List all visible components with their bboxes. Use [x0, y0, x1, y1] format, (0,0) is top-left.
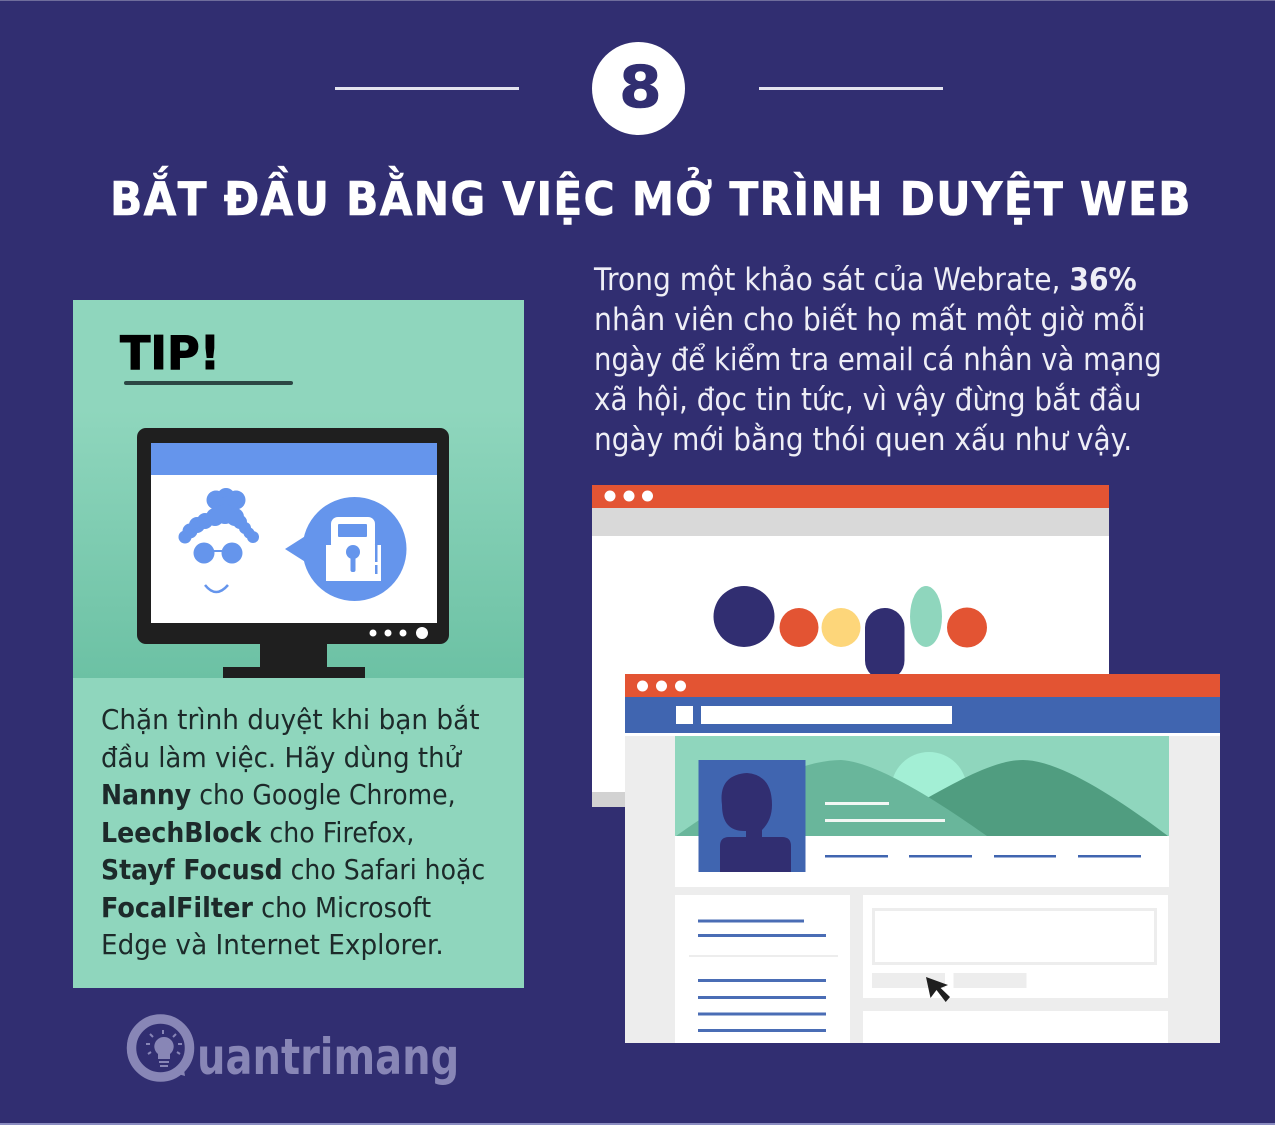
icon: monitor — [137, 428, 449, 678]
icon: mouse cursor — [926, 977, 950, 1002]
tip body text: Stayf Focusd cho Safari hoặc — [101, 853, 485, 886]
intro paragraph: xã hội, đọc tin tức, vì vậy đừng bắt đầu — [594, 382, 1142, 418]
tip body text: Nanny cho Google Chrome, — [101, 778, 456, 811]
title: BẮT ĐẦU BẰNG VIỆC MỞ TRÌNH DUYỆT WEB — [110, 172, 1192, 226]
header: number badge with lines: 8 — [619, 53, 662, 121]
intro paragraph: Trong một khảo sát của Webrate, 36% — [594, 262, 1137, 298]
tip body text: FocalFilter cho Microsoft — [101, 890, 431, 924]
watermark: Quantrimang logo: uantrimang — [197, 1028, 459, 1086]
illustration: front browser window with profile page — [625, 674, 1220, 1043]
tip body text: LeechBlock cho Firefox, — [101, 816, 414, 848]
tip underline — [124, 381, 293, 385]
tip body text: Edge và Internet Explorer. — [101, 928, 444, 961]
tip body text: Chặn trình duyệt khi bạn bắt — [101, 703, 480, 736]
watermark: Quantrimang logo — [126, 1014, 459, 1086]
intro paragraph: ngày mới bằng thói quen xấu như vậy. — [594, 422, 1132, 458]
illustration: back browser window with Google — [592, 485, 1109, 807]
tip heading: TIP! — [120, 326, 220, 380]
tip body text: đầu làm việc. Hãy dùng thử — [101, 740, 461, 774]
intro paragraph — [594, 262, 1162, 458]
panel: tip — [73, 300, 524, 988]
tip gradient background — [73, 410, 524, 678]
intro paragraph: nhân viên cho biết họ mất một giờ mỗi — [594, 302, 1145, 338]
header: number badge with lines — [335, 42, 943, 135]
tip body text — [101, 703, 485, 961]
intro paragraph: ngày để kiểm tra email cá nhân và mạng — [594, 342, 1162, 378]
